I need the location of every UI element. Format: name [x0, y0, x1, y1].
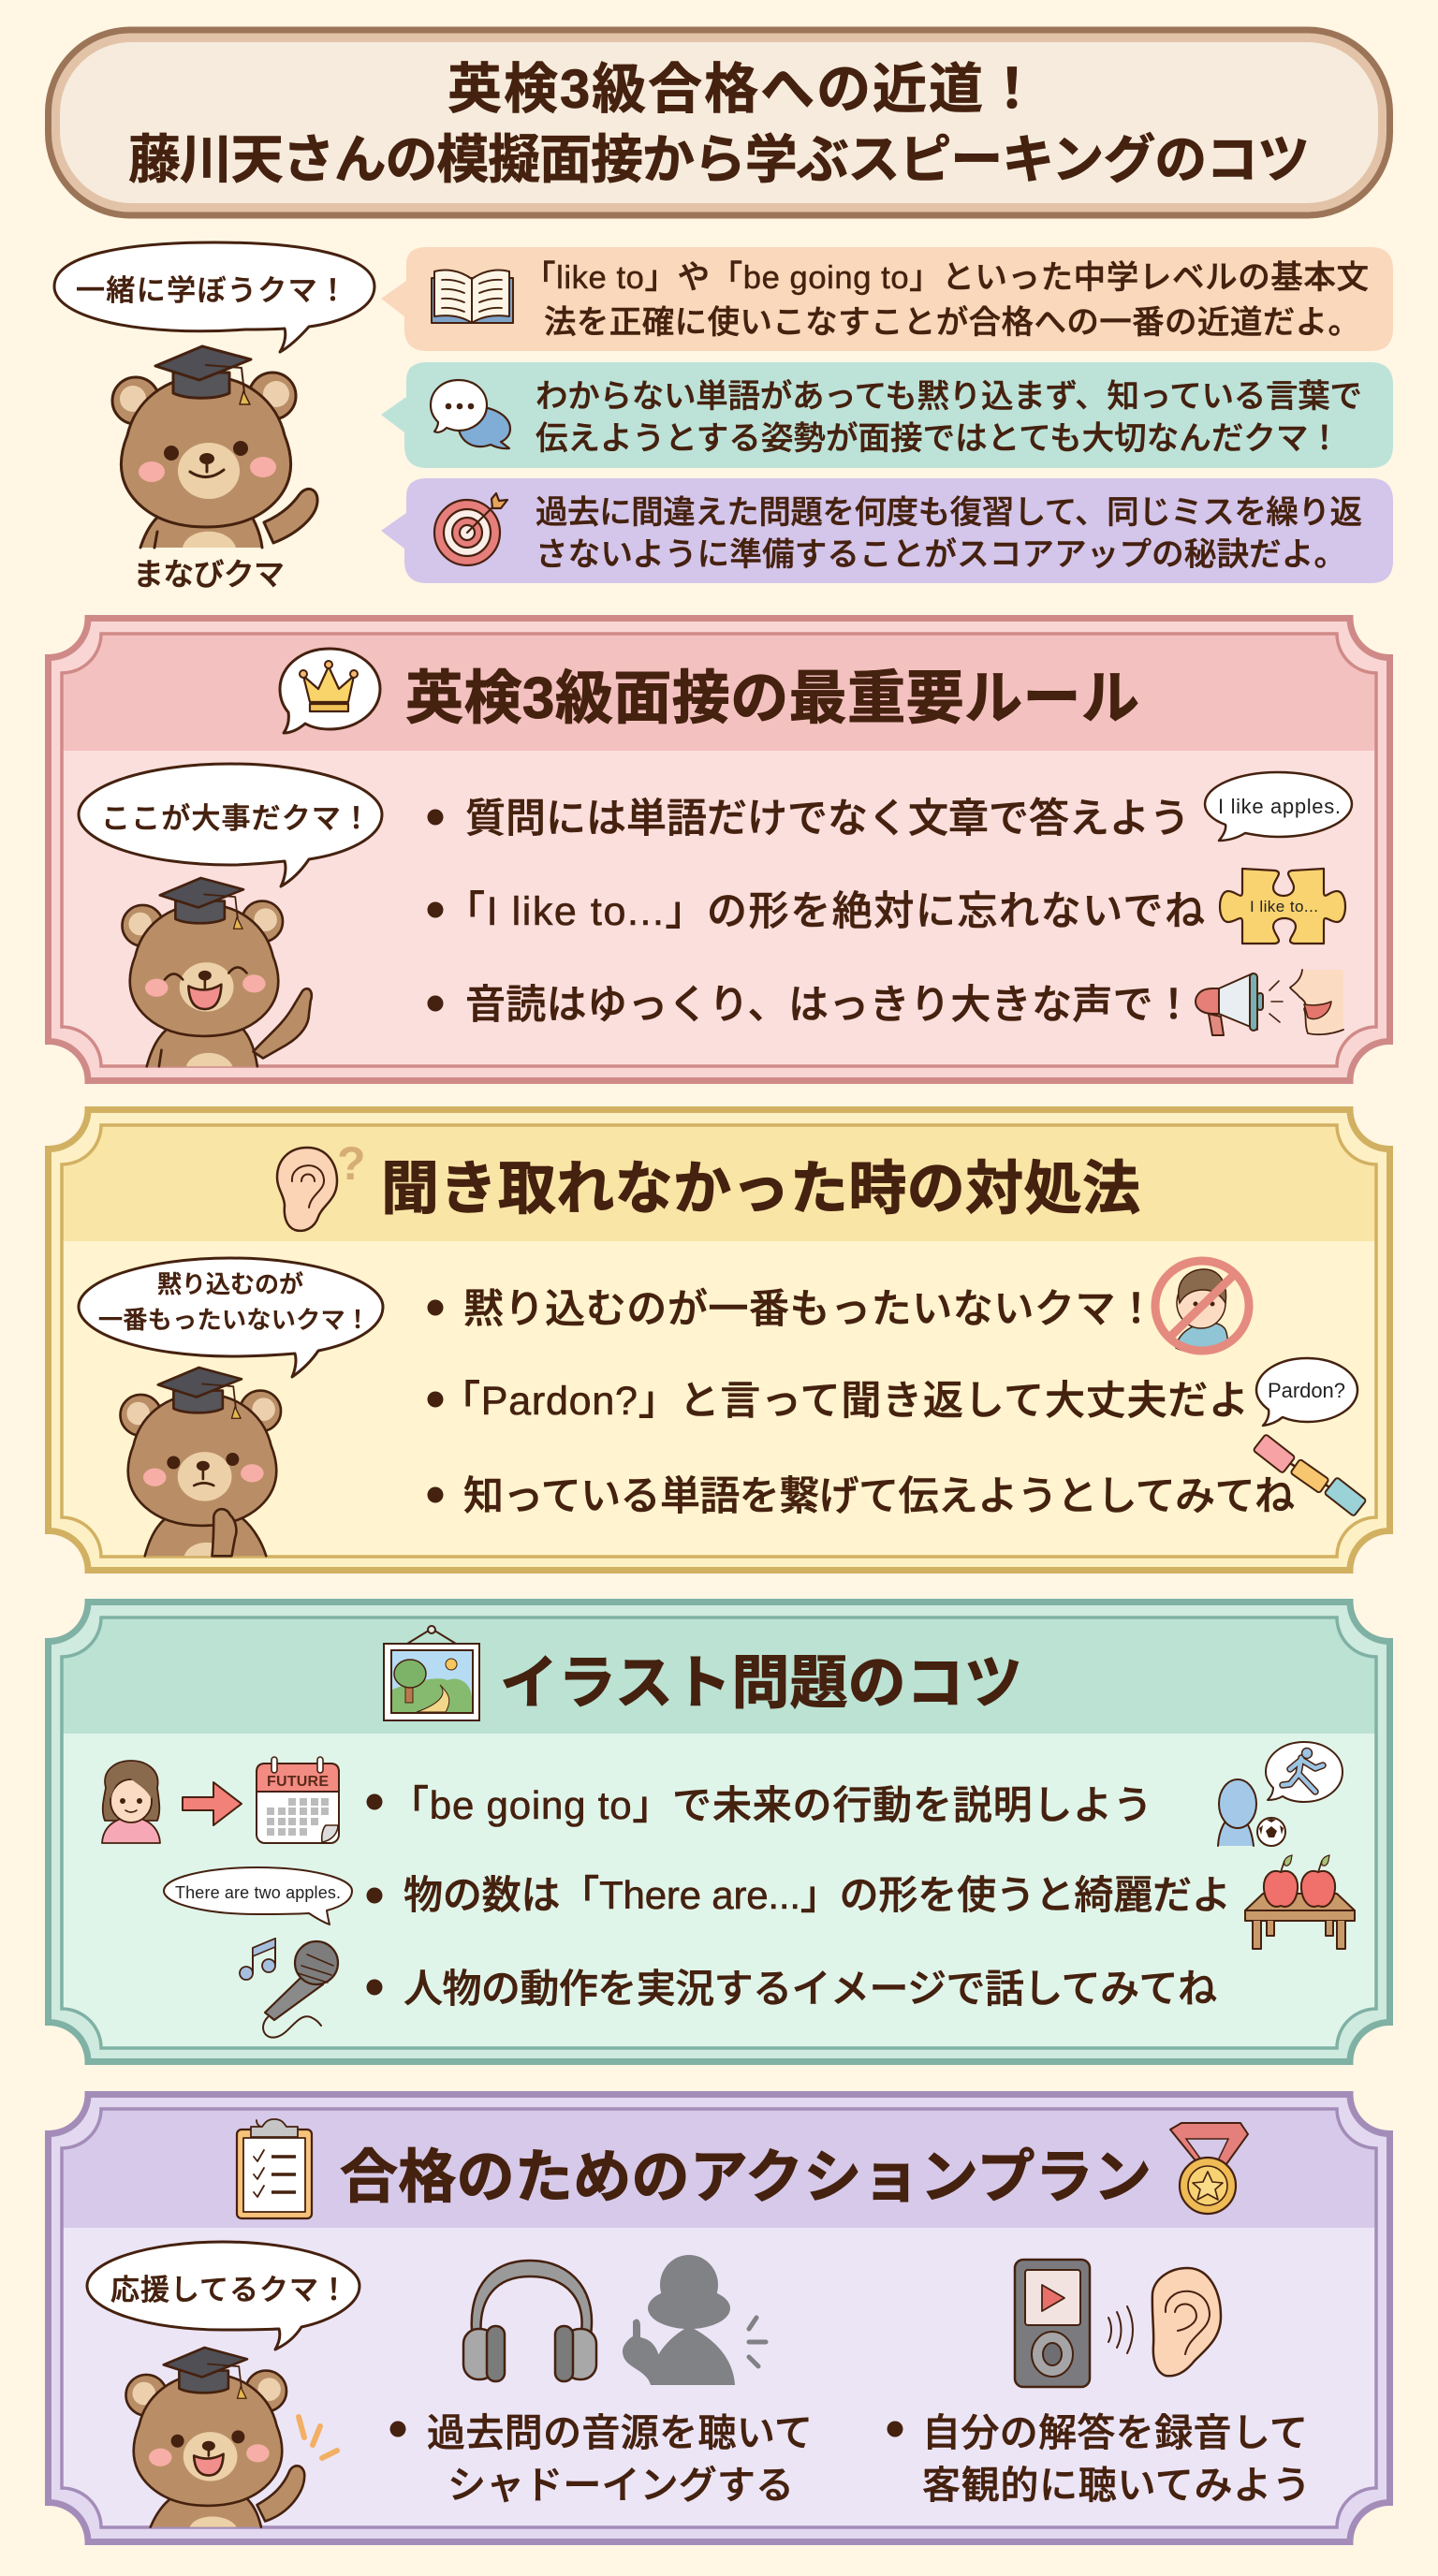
bullet list: [427, 797, 1205, 1028]
speech bubble: 一番もったいないクマ！: [98, 1306, 370, 1334]
intro speech bubble: [54, 242, 374, 352]
action text: recording: [888, 2411, 1311, 2507]
icon: sound waves: [1108, 2306, 1133, 2353]
icon: speaking silhouette: [623, 2255, 766, 2385]
intro speech bubble: 一緒に学ぼうクマ！: [76, 274, 347, 307]
panel: picture questions: [49, 1603, 1389, 2061]
heading: イラスト問題のコツ: [500, 1651, 1022, 1716]
arrow: [183, 1782, 242, 1825]
icon: open book: [432, 271, 513, 323]
heading: 英検3級面接の最重要ルール: [405, 666, 1139, 731]
icon: clipboard: [237, 2119, 312, 2218]
heading line 2: 藤川天さんの模擬面接から学ぶスピーキングのコツ: [128, 130, 1310, 189]
icon: girl to future calendar: FUTURE: [267, 1774, 329, 1790]
speech bubble: 黙り込むのが: [157, 1270, 303, 1298]
icon: target: [434, 493, 507, 565]
heading: 聞き取れなかった時の対処法: [381, 1157, 1140, 1222]
bullet list: 音読はゆっくり、はっきり大きな声で！: [465, 983, 1194, 1028]
bullet list: 人物の動作を実況するイメージで話してみてね: [404, 1967, 1217, 2011]
tip box: grammar: [381, 247, 1393, 351]
icon: puzzle piece: [1220, 869, 1345, 944]
heading line 1: 英検3級合格への近道！: [448, 59, 1039, 120]
icon: headphones: [463, 2261, 596, 2381]
speech bubble: [79, 764, 382, 886]
text: 過去に間違えた問題を何度も復習して、同じミスを繰り返: [536, 495, 1362, 531]
action text: recording: 客観的に聴いてみよう: [922, 2464, 1311, 2507]
bullet list: [427, 1287, 1295, 1519]
icon: ear: [1152, 2268, 1221, 2376]
action text: shadowing: シャドーイングする: [448, 2464, 794, 2507]
speech bubble: [79, 1258, 383, 1377]
mascot name: まなびクマ: [133, 557, 285, 592]
action text: shadowing: [389, 2411, 813, 2507]
action text: recording: 自分の解答を録音して: [922, 2411, 1308, 2454]
mascot bear: manabi kuma: [112, 346, 317, 548]
icon: cheer sparks: [299, 2417, 337, 2458]
icon: Pardon bubble: [1256, 1358, 1357, 1426]
icon: girl to future calendar: [102, 1757, 339, 1843]
bullet list: 物の数は「There are...」の形を使うと綺麗だよ: [404, 1873, 1231, 1917]
mascot bear: thinking: [120, 1368, 281, 1556]
icon: linked word cards: [1253, 1434, 1367, 1516]
icon: no silent person: [1155, 1261, 1249, 1353]
bullet list: 黙り込むのが一番もったいないクマ！: [463, 1287, 1156, 1332]
icon: I like apples bubble: [1205, 772, 1352, 841]
icon: music player: [1015, 2260, 1090, 2387]
panel: when you could not hear: [49, 1110, 1389, 1571]
tip box: grammar: 法を正確に使いこなすことが合格への一番の近道だよ。: [544, 305, 1360, 341]
icon: There are two apples bubble: [164, 1867, 352, 1925]
text: わからない単語があっても黙り込まず、知っている言葉で: [536, 379, 1362, 415]
bullet list: 質問には単語だけでなく文章で答えよう: [465, 797, 1190, 842]
speech bubble: ここが大事だクマ！: [101, 802, 371, 835]
speech bubble: 応援してるクマ！: [110, 2274, 348, 2306]
title banner: [49, 30, 1389, 215]
icon: ear with question mark: [277, 1137, 366, 1231]
icon: There are two apples bubble: There are two apples.: [175, 1883, 341, 1902]
tip box: review mistakes: [381, 478, 1393, 583]
bullet list: 「I like to...」の形を絶対に忘れないでね: [445, 889, 1205, 934]
icon: I like apples bubble: I like apples.: [1218, 795, 1341, 818]
action text: shadowing: 過去問の音源を聴いて: [427, 2411, 813, 2454]
icon: crown speech bubble: [280, 649, 380, 733]
icon: ear with question mark: ?: [337, 1137, 366, 1190]
tip box: speak with words you know: 伝えようとする姿勢が面接ではとても大切なんだクマ！: [536, 421, 1341, 457]
tip box: review mistakes: さないように準備することがスコアアップの秘訣だよ。: [536, 537, 1346, 573]
panel: action plan: [49, 2095, 1389, 2542]
icon: music notes and microphone: [240, 1939, 338, 2038]
bullet list: 「Pardon?」と言って聞き返して大丈夫だよ: [440, 1379, 1249, 1424]
calendar: [257, 1764, 339, 1843]
icon: puzzle piece: I like to...: [1250, 898, 1318, 915]
icon: person thinking about running: [1218, 1742, 1343, 1846]
icon: two apples on table: [1245, 1855, 1355, 1949]
icon: framed picture: [384, 1626, 479, 1720]
bullet list: [367, 1783, 1231, 2011]
speech bubble: [87, 2242, 360, 2349]
bullet list: 知っている単語を繋げて伝えようとしてみてね: [463, 1474, 1295, 1519]
bullet list: 「be going to」で未来の行動を説明しよう: [389, 1783, 1152, 1827]
text: 「like to」や「be going to」といった中学レベルの基本文: [523, 260, 1369, 296]
panel: most important rules: [49, 618, 1389, 1080]
mascot bear: pointing: [122, 878, 312, 1066]
tip box: speak with words you know: [381, 362, 1393, 468]
heading: 合格のためのアクションプラン: [340, 2145, 1152, 2210]
icon: megaphone and mouth: [1196, 970, 1343, 1035]
icon: chat bubbles: [431, 380, 510, 448]
icon: medal: [1170, 2123, 1248, 2214]
mascot bear: cheering: [125, 2348, 304, 2527]
icon: Pardon bubble: Pardon?: [1268, 1379, 1345, 1402]
